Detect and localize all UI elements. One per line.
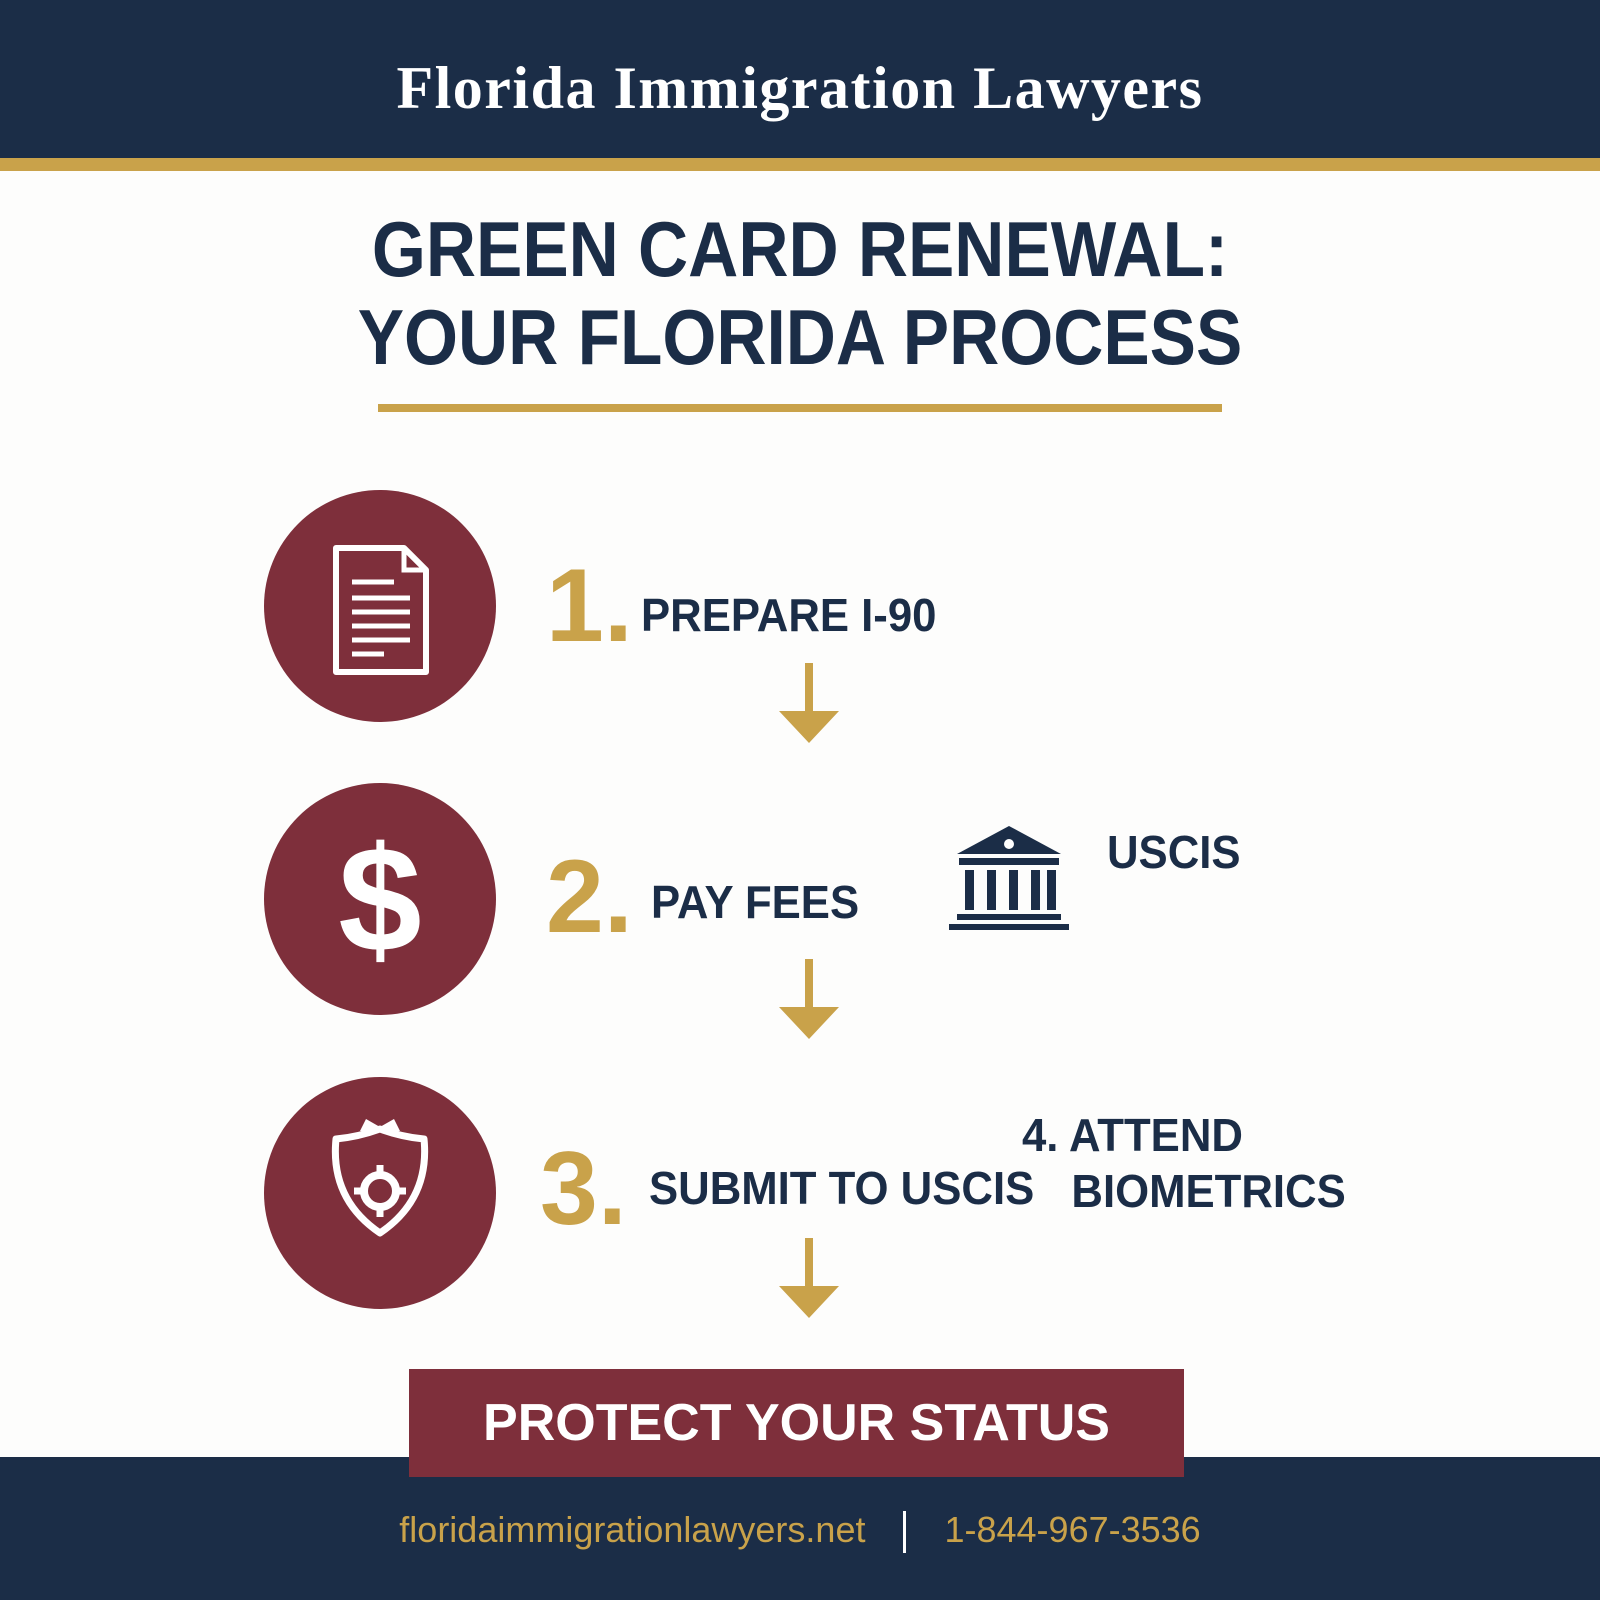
headline [358, 205, 1242, 381]
icon: dollar [264, 783, 496, 1015]
step 3: SUBMIT TO USCIS [649, 1162, 1034, 1214]
arrow 1 [779, 663, 839, 743]
step 1: 1. [546, 548, 633, 664]
headline: GREEN CARD RENEWAL: [372, 205, 1228, 293]
step 3: 3. [540, 1131, 627, 1247]
footer bar [0, 1457, 1600, 1600]
icon: dollar: $ [338, 815, 422, 983]
step 2: 2. [546, 839, 633, 955]
icon: shield [264, 1077, 496, 1309]
footer contact: floridaimmigrationlawyers.net 1-844-967-3536 [399, 1509, 1201, 1550]
icon: document [264, 490, 496, 722]
step 1: PREPARE I-90 [641, 589, 936, 641]
step 2: PAY FEES [651, 876, 859, 928]
header bar [0, 0, 1600, 158]
step 3 [264, 1077, 1346, 1309]
icon: bank [949, 826, 1069, 930]
label: USCIS: USCIS [1107, 826, 1241, 878]
step 2 [264, 783, 1241, 1015]
label: attend biometrics: 4. ATTEND [1022, 1109, 1243, 1161]
callout: protect your status: PROTECT YOUR STATUS [483, 1394, 1110, 1452]
label: attend biometrics: BIOMETRICS [1071, 1165, 1346, 1217]
arrow 2 [779, 959, 839, 1039]
header title: Florida Immigration Lawyers [396, 55, 1204, 121]
step 1 [264, 490, 936, 722]
callout: protect your status [409, 1369, 1184, 1477]
headline: YOUR FLORIDA PROCESS [358, 293, 1242, 381]
arrow 3 [779, 1238, 839, 1318]
label: attend biometrics [1022, 1109, 1346, 1217]
